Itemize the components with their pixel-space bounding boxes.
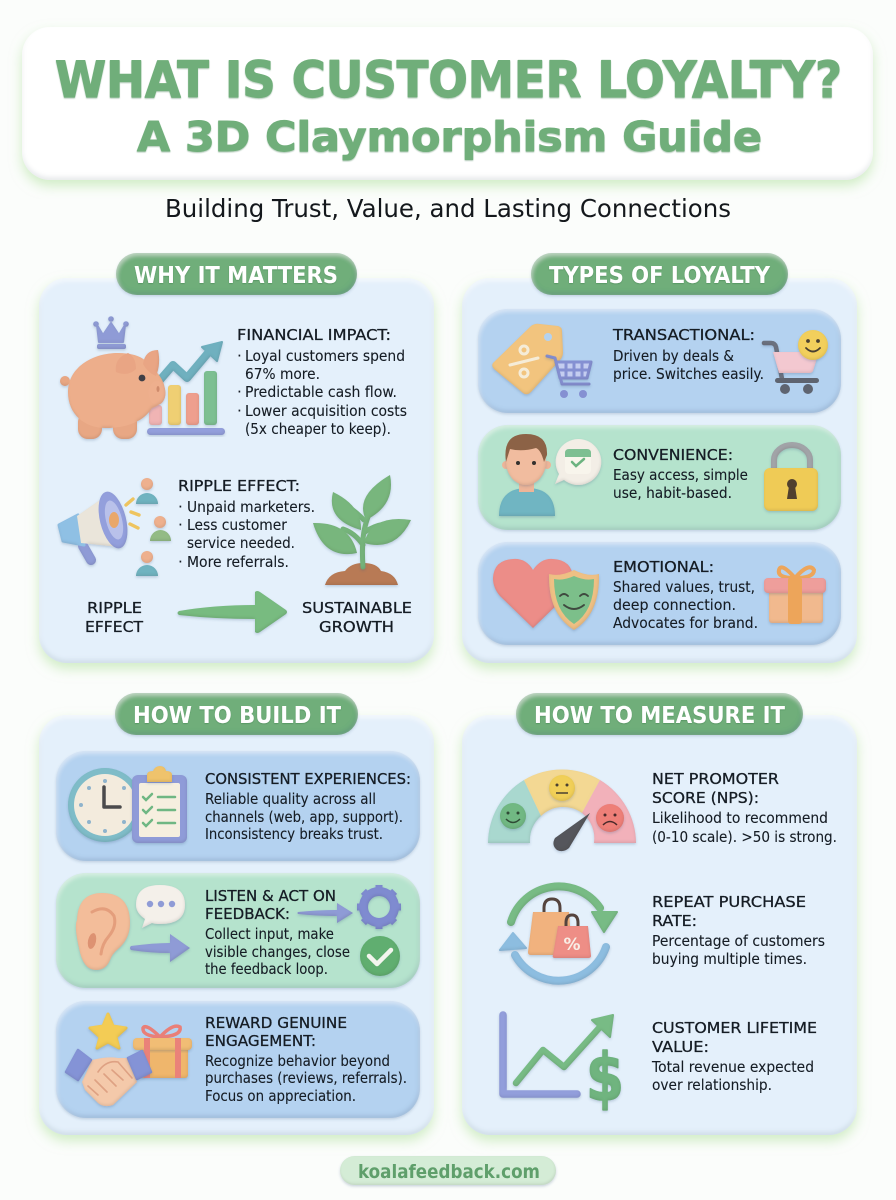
icon: clock and clipboard bbox=[68, 766, 187, 843]
heading: how to build it: HOW TO BUILD IT bbox=[133, 703, 341, 729]
icon: lifetime value chart bbox=[503, 1015, 624, 1116]
text: repeat purchase rate: RATE: bbox=[652, 912, 697, 930]
icon: check badge bbox=[360, 936, 400, 976]
text: emotional: EMOTIONAL: bbox=[613, 558, 714, 576]
text: listen and act: the feedback loop. bbox=[205, 960, 328, 978]
text: financial impact: Predictable cash flow. bbox=[245, 383, 397, 401]
text: consistent experiences: channels (web, app, support). bbox=[205, 808, 403, 826]
icon: padlock bbox=[764, 445, 818, 511]
icon: lifetime value chart: $ bbox=[586, 1039, 624, 1116]
text: repeat purchase rate: Percentage of customers bbox=[652, 932, 825, 950]
icon: piggy bank with crown and chart bbox=[60, 316, 225, 439]
text: ripple effect: RIPPLE EFFECT: bbox=[178, 477, 300, 495]
text: transactional: Driven by deals & bbox=[613, 347, 734, 365]
text: ripple effect: · bbox=[178, 498, 183, 516]
text: net promoter score: NET PROMOTER bbox=[652, 770, 779, 788]
text: reward genuine engagement: ENGAGEMENT: bbox=[205, 1032, 316, 1050]
heading: types of loyalty: TYPES OF LOYALTY bbox=[549, 263, 770, 289]
text: consistent experiences: Reliable quality across all bbox=[205, 790, 376, 808]
text: financial impact bbox=[237, 326, 407, 438]
text: ripple effect: · bbox=[178, 516, 183, 534]
text: financial impact: · bbox=[237, 347, 242, 365]
heading: how to measure it: HOW TO MEASURE IT bbox=[534, 703, 785, 729]
text: net promoter score bbox=[652, 770, 837, 846]
text: net promoter score: Likelihood to recommend bbox=[652, 809, 828, 827]
panel: how to measure it bbox=[462, 715, 857, 1135]
text: customer lifetime value: CUSTOMER LIFETIME bbox=[652, 1019, 817, 1037]
label: ripple effect: RIPPLE bbox=[87, 599, 142, 617]
text: ripple effect: Unpaid marketers. bbox=[187, 498, 315, 516]
card: consistent experiences bbox=[56, 751, 420, 861]
icon: plant bbox=[313, 475, 411, 585]
label: sustainable growth: GROWTH bbox=[319, 618, 394, 636]
icon: price tag and cart bbox=[492, 324, 591, 398]
text: listen and act: FEEDBACK: bbox=[205, 905, 290, 923]
text: net promoter score: (0-10 scale). >50 is strong. bbox=[652, 828, 837, 846]
card: transactional bbox=[478, 309, 841, 413]
text: financial impact: Lower acquisition costs bbox=[245, 402, 407, 420]
header panel bbox=[22, 27, 873, 180]
text: listen and act: Collect input, make bbox=[205, 925, 334, 943]
label: sustainable growth: SUSTAINABLE bbox=[302, 599, 412, 617]
subtitle: Building Trust, Value, and Lasting Connections bbox=[165, 194, 731, 223]
card: convenience bbox=[478, 425, 841, 530]
icon: heart and shield bbox=[493, 559, 599, 630]
text: financial impact: · bbox=[237, 402, 242, 420]
icon: megaphone and people bbox=[59, 478, 171, 576]
text: financial impact: · bbox=[237, 383, 242, 401]
title bbox=[55, 51, 842, 161]
text: ripple effect: More referrals. bbox=[187, 553, 289, 571]
text: emotional bbox=[613, 558, 758, 632]
text: repeat purchase rate bbox=[652, 893, 825, 968]
text: financial impact: (5x cheaper to keep). bbox=[245, 420, 391, 438]
text: reward genuine engagement: REWARD GENUINE bbox=[205, 1014, 347, 1032]
title: A 3D Claymorphism Guide bbox=[137, 113, 762, 161]
text: consistent experiences bbox=[205, 770, 411, 843]
footer: website pill bbox=[340, 1156, 556, 1185]
text: customer lifetime value: over relationship. bbox=[652, 1076, 772, 1094]
text: repeat purchase rate: REPEAT PURCHASE bbox=[652, 893, 806, 911]
text: ripple effect: Less customer bbox=[187, 516, 288, 534]
text: convenience: use, habit-based. bbox=[613, 484, 732, 502]
text: net promoter score: SCORE (NPS): bbox=[652, 789, 759, 807]
icon: star, gift and handshake bbox=[66, 1014, 192, 1106]
text: financial impact: Loyal customers spend bbox=[245, 347, 405, 365]
heading: how to build it bbox=[115, 693, 358, 735]
panel: how to build it bbox=[39, 715, 434, 1135]
arrow: ear to text bbox=[130, 934, 190, 962]
label: sustainable growth bbox=[302, 599, 412, 636]
icon: gear bbox=[357, 885, 401, 929]
icon: person with calendar bubble bbox=[499, 434, 601, 516]
text: listen and act bbox=[205, 887, 350, 978]
text: customer lifetime value bbox=[651, 1019, 817, 1094]
text: reward genuine engagement bbox=[205, 1014, 407, 1105]
icon: gift box bbox=[764, 567, 826, 624]
panel: types of loyalty bbox=[462, 278, 857, 663]
card: emotional bbox=[478, 542, 841, 645]
text: emotional: Shared values, trust, bbox=[613, 578, 755, 596]
text: ripple effect bbox=[178, 477, 315, 571]
text: ripple effect: service needed. bbox=[187, 534, 295, 552]
text: emotional: Advocates for brand. bbox=[613, 614, 758, 632]
text: financial impact: 67% more. bbox=[245, 365, 320, 383]
text: reward genuine engagement: Focus on appreciation. bbox=[205, 1087, 356, 1105]
text: consistent experiences: Inconsistency breaks trust. bbox=[205, 825, 383, 843]
text: reward genuine engagement: purchases (reviews, referrals). bbox=[205, 1069, 407, 1087]
card: listen and act on feedback bbox=[56, 873, 420, 988]
card: reward genuine engagement bbox=[56, 1001, 420, 1118]
heading: why it matters: WHY IT MATTERS bbox=[134, 263, 338, 289]
text: financial impact: FINANCIAL IMPACT: bbox=[237, 326, 391, 344]
heading: how to measure it bbox=[516, 693, 803, 735]
label: ripple effect bbox=[85, 599, 144, 636]
text: listen and act: visible changes, close bbox=[205, 943, 350, 961]
icon: ear and speech bubble bbox=[76, 885, 185, 970]
text: ripple effect: · bbox=[178, 553, 183, 571]
text: transactional: price. Switches easily. bbox=[613, 365, 764, 383]
icon: cart with smiley bbox=[764, 330, 828, 394]
text: convenience: Easy access, simple bbox=[613, 466, 748, 484]
text: listen and act: LISTEN & ACT ON bbox=[205, 887, 336, 905]
title: WHAT IS CUSTOMER LOYALTY? bbox=[55, 51, 842, 109]
text: convenience: CONVENIENCE: bbox=[613, 446, 733, 464]
text: transactional: TRANSACTIONAL: bbox=[612, 326, 755, 344]
text: convenience bbox=[613, 446, 748, 502]
footer: website pill: koalafeedback.com bbox=[358, 1161, 540, 1183]
text: reward genuine engagement: Recognize behavior beyond bbox=[205, 1052, 390, 1070]
text: emotional: deep connection. bbox=[613, 596, 736, 614]
text: repeat purchase rate: buying multiple times. bbox=[652, 950, 807, 968]
icon: repeat purchase cycle bbox=[500, 886, 617, 981]
heading: types of loyalty bbox=[531, 253, 788, 295]
icon: repeat purchase cycle: % bbox=[563, 935, 581, 955]
arrow: ripple effect to growth bbox=[178, 591, 287, 633]
text: consistent experiences: CONSISTENT EXPERIENCES: bbox=[205, 770, 411, 788]
text: transactional bbox=[612, 326, 764, 383]
text: customer lifetime value: VALUE: bbox=[652, 1038, 709, 1056]
heading: why it matters bbox=[116, 253, 357, 295]
text: customer lifetime value: Total revenue expected bbox=[651, 1058, 814, 1076]
panel: why it matters bbox=[39, 278, 434, 663]
arrow: feedback to gear bbox=[298, 903, 353, 923]
icon: nps gauge bbox=[488, 769, 636, 851]
label: ripple effect: EFFECT bbox=[85, 618, 144, 636]
